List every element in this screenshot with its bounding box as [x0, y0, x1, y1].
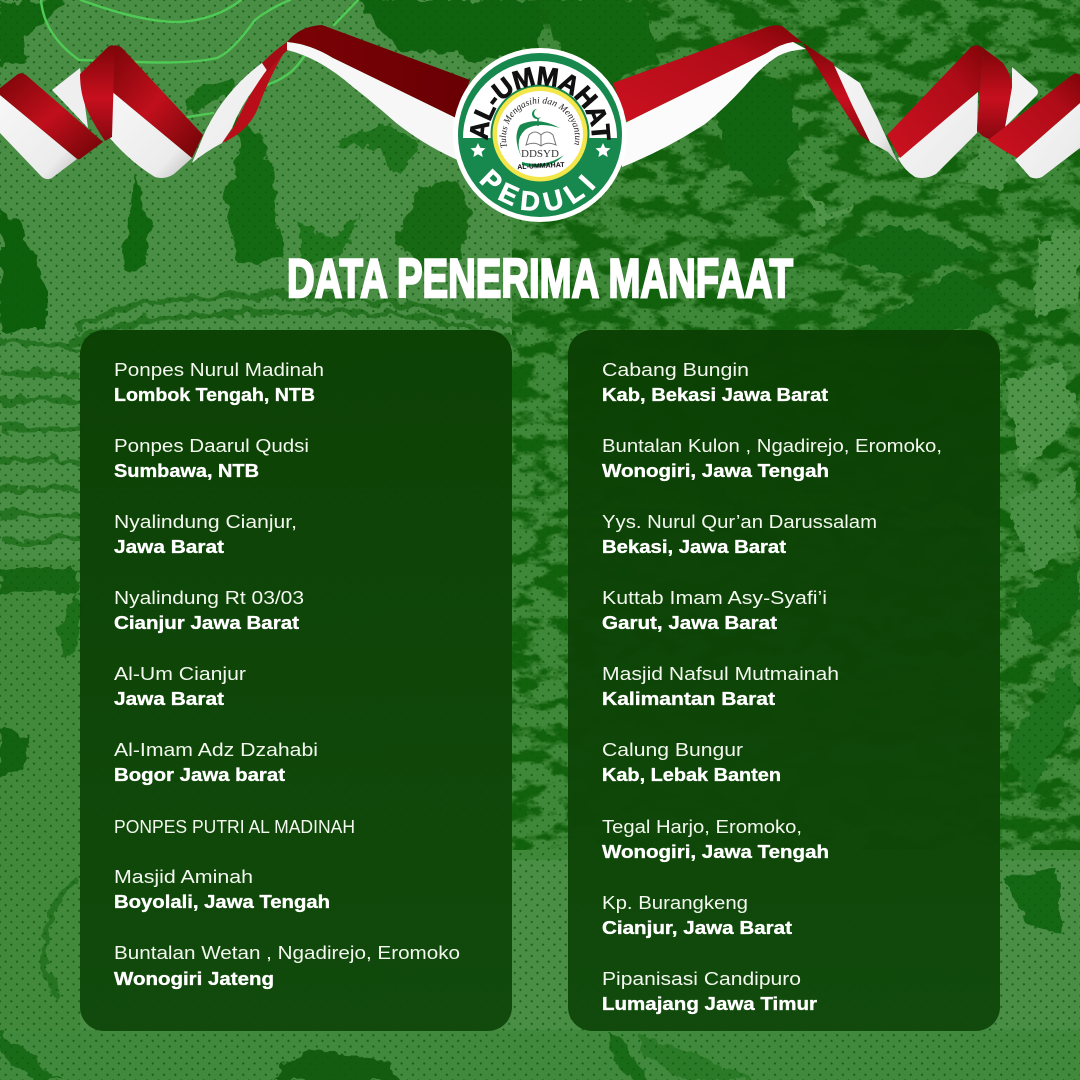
entry: Buntalan Kulon: Buntalan Kulon , Ngadirejo, Eromoko, [602, 435, 942, 456]
entry: Masjid Nafsul Mutmainah: Masjid Nafsul Mutmainah [602, 663, 839, 684]
entry: Pipanisasi Candipuro: Lumajang Jawa Timur [602, 993, 817, 1014]
bright green scribble [41, 0, 358, 118]
entry: Al-Um Cianjur: Al-Um Cianjur [114, 663, 246, 684]
entry: Masjid Aminah [114, 866, 330, 912]
logo DDSYD: DDSYD [521, 148, 559, 160]
foliage mottling [512, 0, 1080, 850]
entry: Pipanisasi Candipuro: Pipanisasi Candipuro [602, 968, 801, 989]
logo: Al-Ummahat Peduli badge [454, 48, 626, 222]
logo text: AL-UMMAHAT: AL-UMMAHAT [470, 66, 611, 140]
entry: Cabang Bungin [602, 359, 828, 405]
logo open book [526, 132, 556, 146]
pipe stripes [0, 296, 520, 1000]
entry: Kuttab Imam Asy-Syafi'i: Kuttab Imam Asy-Syafi’i [602, 587, 827, 608]
entry: Ponpes Daarul Qudsi: Sumbawa, NTB [114, 460, 259, 481]
entry: Pipanisasi Candipuro [602, 968, 817, 1014]
entry: Calung Bungur: Calung Bungur [602, 739, 743, 760]
entry: Al-Um Cianjur [114, 663, 246, 709]
entry: Tegal Harjo: Tegal Harjo, Eromoko, [602, 816, 802, 837]
logo stars [470, 143, 610, 157]
entry: Al-Imam Adz Dzahabi: Al-Imam Adz Dzahabi [114, 739, 318, 760]
entry: Nyalindung Cianjur: Jawa Barat [114, 536, 224, 557]
entry: Kp. Burangkeng [602, 892, 792, 938]
entry: Buntalan Wetan: Wonogiri Jateng [114, 968, 274, 989]
entry: Calung Bungur: Kab, Lebak Banten [602, 764, 781, 785]
panel: left list [80, 330, 512, 1031]
entry: Calung Bungur [602, 739, 781, 785]
entry: Buntalan Kulon [602, 435, 942, 481]
entry: Buntalan Wetan: Buntalan Wetan , Ngadirejo, Eromoko [114, 942, 460, 963]
entry: Kuttab Imam Asy-Syafi'i: Garut, Jawa Barat [602, 612, 777, 633]
entry: Buntalan Kulon: Wonogiri, Jawa Tengah [602, 460, 829, 481]
logo swoosh [522, 155, 564, 167]
entry: Masjid Aminah: Boyolali, Jawa Tengah [114, 891, 330, 912]
ribbon: right flag [613, 25, 1080, 179]
logo crescent and dome swoosh [516, 109, 560, 158]
title: DATA PENERIMA MANFAAT [287, 247, 793, 309]
entry: Kp. Burangkeng: Cianjur, Jawa Barat [602, 917, 792, 938]
entry: Yys. Nurul Qur'an Darussalam: Yys. Nurul Qur’an Darussalam [602, 511, 877, 532]
entry: Nyalindung Rt 03/03: Nyalindung Rt 03/03 [114, 587, 304, 608]
logo small name: AL-UMMAHAT [517, 162, 565, 171]
entry: Al-Imam Adz Dzahabi: Bogor Jawa barat [114, 764, 285, 785]
entry: Masjid Nafsul Mutmainah: Kalimantan Barat [602, 688, 775, 709]
logo top white band [463, 61, 617, 138]
logo text: PEDULI: PEDULI [479, 168, 596, 211]
entry: Nyalindung Cianjur: Nyalindung Cianjur, [114, 511, 297, 532]
entry: Yys. Nurul Qur'an Darussalam [602, 511, 877, 557]
entry: Tegal Harjo [602, 816, 829, 862]
entry: Al-Um Cianjur: Jawa Barat [114, 688, 224, 709]
entry: Al-Imam Adz Dzahabi [114, 739, 318, 785]
panel: right list [568, 330, 1000, 1031]
entry: Nyalindung Cianjur [114, 511, 297, 557]
entry: Ponpes Nurul Madinah [114, 359, 324, 405]
entry: Cabang Bungin: Cabang Bungin [602, 359, 749, 380]
entry: Nyalindung Rt 03/03: Cianjur Jawa Barat [114, 612, 299, 633]
entry: Ponpes Nurul Madinah: Ponpes Nurul Madinah [114, 359, 324, 380]
entry: Ponpes Nurul Madinah: Lombok Tengah, NTB [114, 384, 315, 405]
entry: Ponpes Putri Al Madinah: PONPES PUTRI AL MADINAH [114, 816, 355, 837]
entry: Cabang Bungin: Kab, Bekasi Jawa Barat [602, 384, 828, 405]
entry: Kuttab Imam Asy-Syafi'i [602, 587, 827, 633]
entry: Nyalindung Rt 03/03 [114, 587, 304, 633]
entry: Masjid Aminah: Masjid Aminah [114, 866, 253, 887]
entry: Tegal Harjo: Wonogiri, Jawa Tengah [602, 841, 829, 862]
entry: Ponpes Daarul Qudsi [114, 435, 309, 481]
entry: Buntalan Wetan [114, 942, 460, 989]
entry: Yys. Nurul Qur'an Darussalam: Bekasi, Jawa Barat [602, 536, 786, 557]
entry: Ponpes Daarul Qudsi: Ponpes Daarul Qudsi [114, 435, 309, 456]
ribbon: left flag [0, 25, 470, 179]
entry: Kp. Burangkeng: Kp. Burangkeng [602, 892, 748, 913]
entry: Masjid Nafsul Mutmainah [602, 663, 839, 709]
